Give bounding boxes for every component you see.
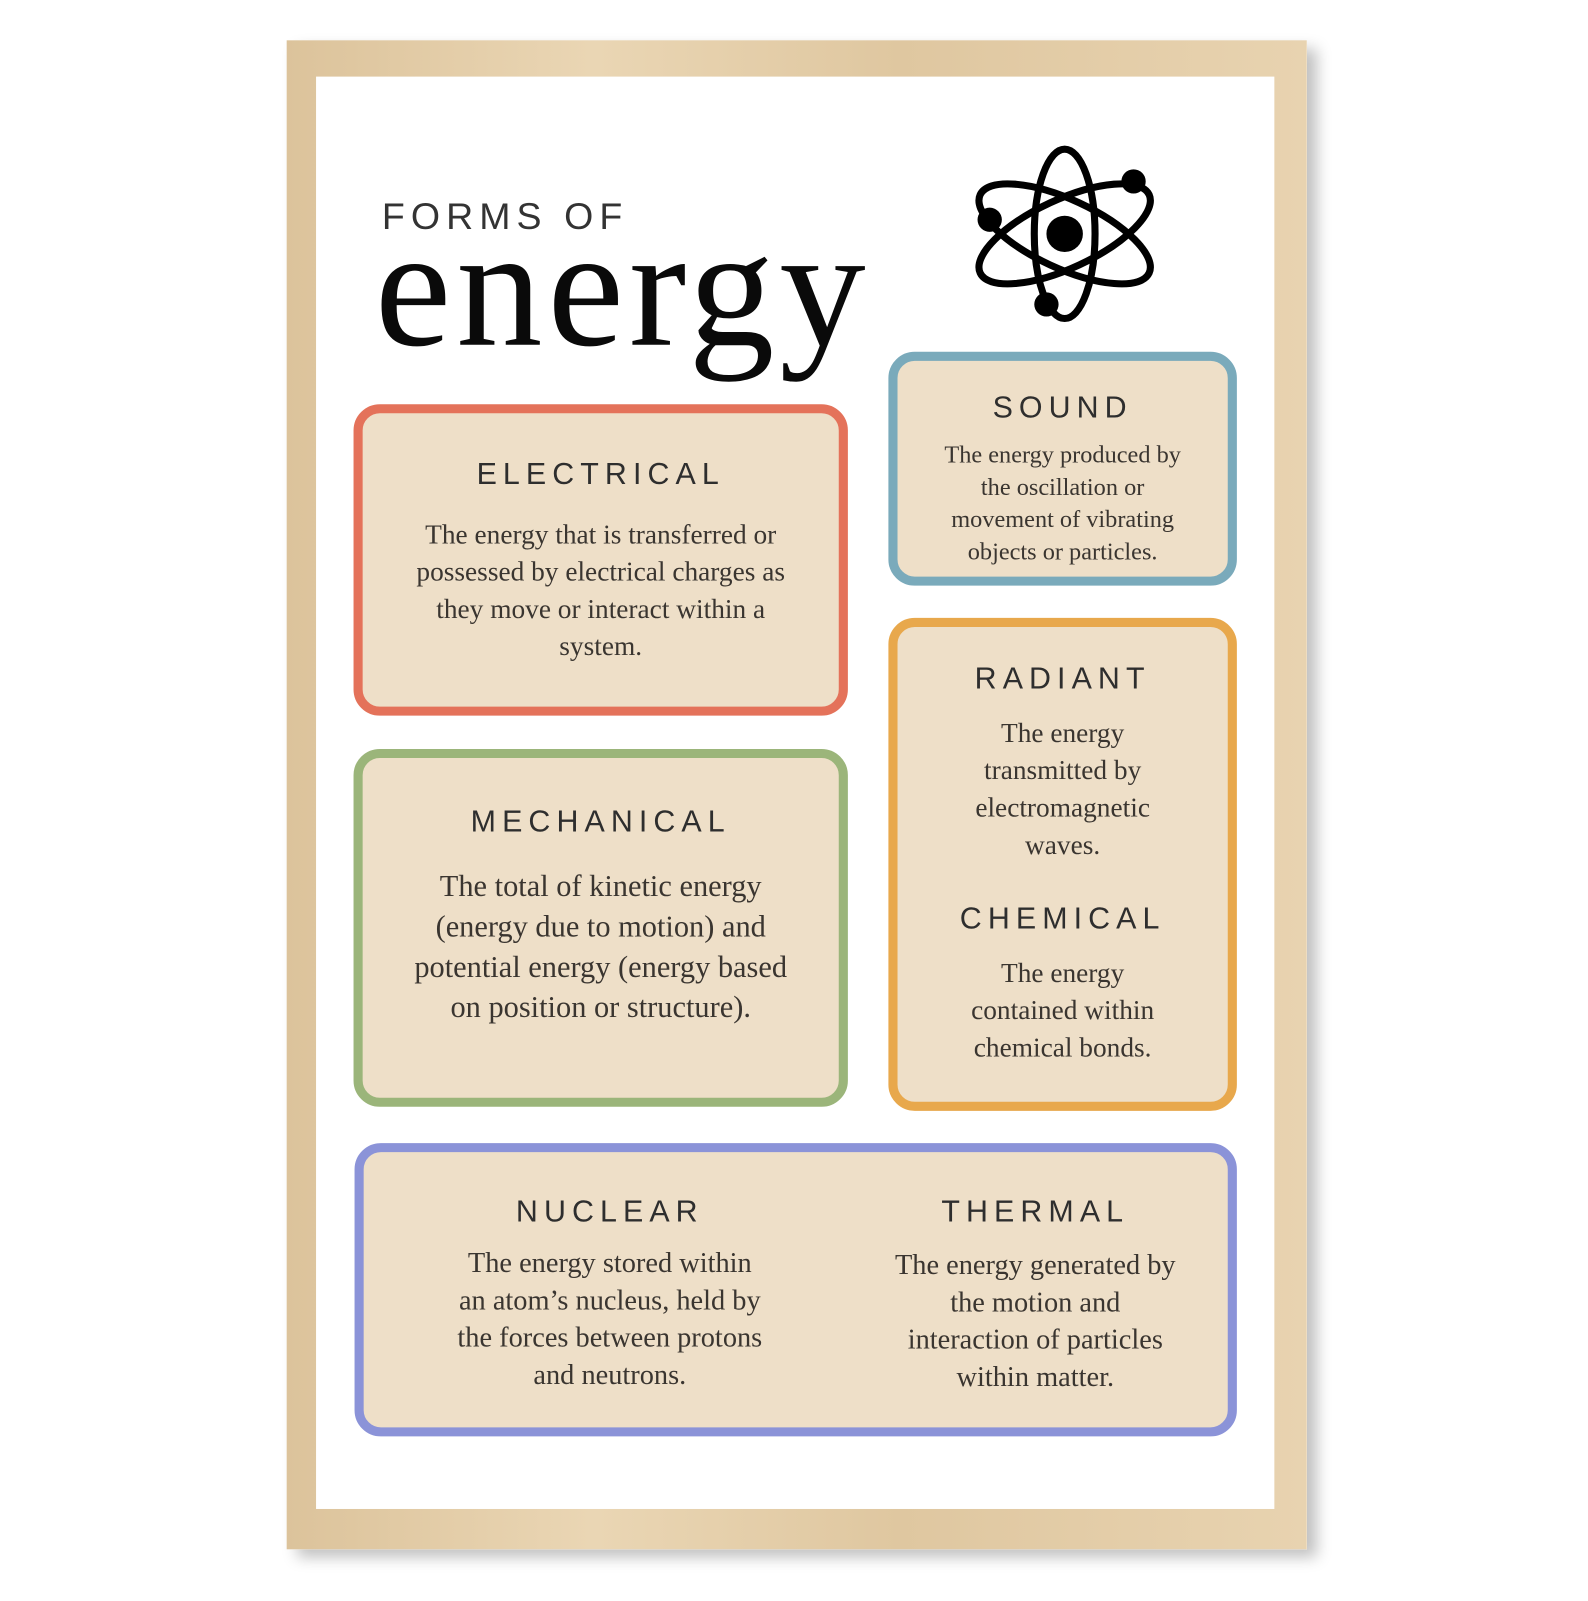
frame: [287, 40, 1307, 1549]
text: thermal: [895, 1250, 1176, 1393]
text: sound: The energy produced by: [944, 443, 1181, 469]
heading: thermal: THERMAL: [941, 1195, 1129, 1229]
text: nuclear: [457, 1248, 762, 1391]
panel: radiant and chemical: [888, 618, 1237, 1111]
heading: chemical: CHEMICAL: [960, 902, 1165, 935]
text: electrical: The energy that is transferred or: [425, 519, 776, 549]
text: mechanical: (energy due to motion) and: [436, 910, 766, 943]
heading: mechanical: MECHANICAL: [471, 805, 731, 839]
text: radiant: [975, 718, 1150, 860]
text: electrical: they move or interact within a: [436, 594, 765, 624]
heading: radiant: RADIANT: [975, 662, 1151, 696]
text: thermal: The energy generated by: [895, 1250, 1176, 1281]
heading: nuclear: NUCLEAR: [516, 1195, 704, 1229]
text: electrical: system.: [559, 631, 642, 661]
subtitle: forms of: FORMS OF: [382, 196, 628, 237]
thermal: [895, 1195, 1176, 1393]
text: mechanical: [414, 870, 787, 1024]
text: chemical: contained within: [971, 995, 1154, 1025]
heading: electrical: ELECTRICAL: [477, 458, 725, 491]
text: mechanical: on position or structure).: [450, 991, 751, 1024]
text: sound: the oscillation or: [981, 475, 1144, 501]
heading: energy: energy: [375, 193, 871, 382]
text: sound: objects or particles.: [968, 539, 1157, 565]
icon: atom: [975, 146, 1154, 322]
text: nuclear: the forces between protons: [457, 1322, 762, 1354]
text: electrical: [416, 519, 785, 661]
panel: mechanical: [354, 749, 848, 1107]
text: nuclear: and neutrons.: [533, 1360, 686, 1391]
panel: sound: [888, 352, 1237, 586]
text: nuclear: an atom’s nucleus, held by: [459, 1285, 761, 1316]
text: radiant: electromagnetic: [975, 792, 1150, 823]
text: radiant: waves.: [1025, 830, 1100, 860]
text: radiant: transmitted by: [984, 755, 1141, 785]
text: sound: [944, 443, 1181, 565]
text: chemical: chemical bonds.: [974, 1032, 1151, 1062]
text: chemical: The energy: [1001, 958, 1124, 988]
text: chemical: [971, 958, 1154, 1062]
panel: electrical: [354, 404, 848, 716]
text: radiant: The energy: [1001, 718, 1124, 748]
text: thermal: the motion and: [950, 1287, 1120, 1318]
poster: [316, 77, 1274, 1509]
text: mechanical: potential energy (energy based: [414, 951, 787, 984]
panel: nuclear and thermal: [355, 1143, 1237, 1436]
nuclear: [457, 1195, 762, 1391]
text: nuclear: The energy stored within: [468, 1248, 752, 1279]
heading: sound: SOUND: [993, 391, 1133, 424]
title: [375, 193, 871, 382]
text: electrical: possessed by electrical charges as: [416, 556, 785, 587]
text: thermal: within matter.: [957, 1362, 1114, 1393]
text: thermal: interaction of particles: [908, 1325, 1163, 1356]
text: sound: movement of vibrating: [951, 507, 1174, 533]
text: mechanical: The total of kinetic energy: [440, 870, 762, 903]
